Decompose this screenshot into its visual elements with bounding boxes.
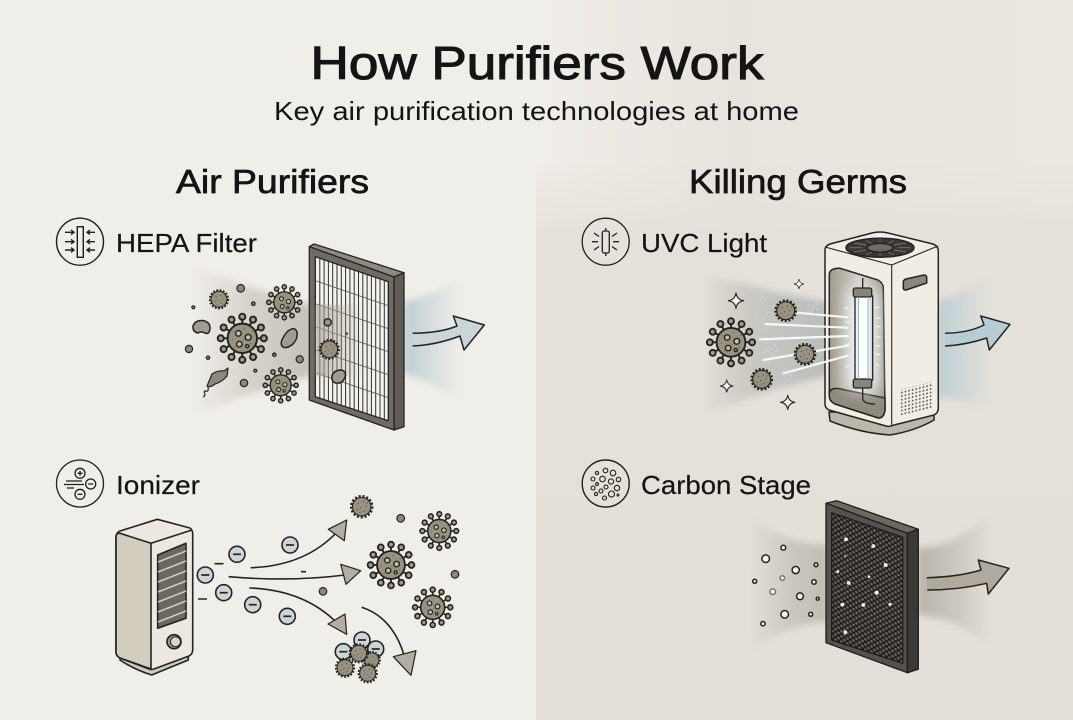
arrow: clean air out bbox=[413, 316, 484, 350]
label: Ionizer: Ionizer bbox=[116, 470, 200, 500]
panel: Ionizer bbox=[56, 460, 459, 682]
airflow through filter bbox=[316, 305, 366, 378]
ionizer device bbox=[116, 519, 193, 675]
carbon filter bbox=[826, 501, 918, 673]
UV lamp bbox=[853, 278, 875, 404]
label: HEPA Filter: HEPA Filter bbox=[116, 228, 257, 258]
airflow out bbox=[404, 276, 462, 404]
label: Carbon Stage: Carbon Stage bbox=[641, 470, 811, 500]
icon: ionizer bbox=[56, 460, 104, 507]
icon: carbon bbox=[582, 460, 629, 507]
icon: HEPA filter bbox=[56, 218, 104, 265]
arrow: clean air out bbox=[927, 560, 1009, 594]
icon: UVC light bbox=[582, 218, 629, 265]
airflow in bbox=[703, 273, 832, 414]
panel: UVC Light bbox=[582, 218, 1010, 435]
filter frame bbox=[309, 244, 404, 430]
UV lamp glow bbox=[848, 290, 878, 390]
particles before filter bbox=[185, 284, 303, 403]
panel: Carbon Stage bbox=[582, 460, 1009, 673]
purifier device bbox=[825, 232, 938, 435]
trapped particles bbox=[320, 319, 348, 383]
airflow in bbox=[192, 266, 312, 416]
arrows: ion flow bbox=[229, 520, 416, 675]
particles and sparkles bbox=[707, 279, 963, 410]
heading: Air Purifiers: Air Purifiers bbox=[176, 163, 369, 200]
ionizer vent slats bbox=[158, 551, 186, 622]
filter pleats bbox=[315, 257, 388, 422]
airflow out bbox=[918, 510, 992, 648]
airflow out bbox=[938, 270, 992, 406]
title: How Purifiers Work bbox=[310, 37, 765, 89]
odor bubbles bbox=[753, 545, 819, 626]
speaker grille bbox=[899, 382, 932, 416]
arrow: clean air out bbox=[945, 316, 1010, 350]
particles passing filter bbox=[836, 537, 892, 634]
heading: Killing Germs: Killing Germs bbox=[689, 163, 907, 200]
clustered particles bbox=[335, 632, 384, 682]
subtitle: Key air purification technologies at home bbox=[274, 96, 799, 126]
negative ions bbox=[197, 537, 306, 624]
airflow in bbox=[748, 517, 828, 652]
target particles bbox=[319, 497, 459, 627]
label: UVC Light: UVC Light bbox=[641, 228, 768, 258]
white rays bbox=[760, 307, 880, 373]
panel: HEPA filter bbox=[56, 218, 484, 430]
